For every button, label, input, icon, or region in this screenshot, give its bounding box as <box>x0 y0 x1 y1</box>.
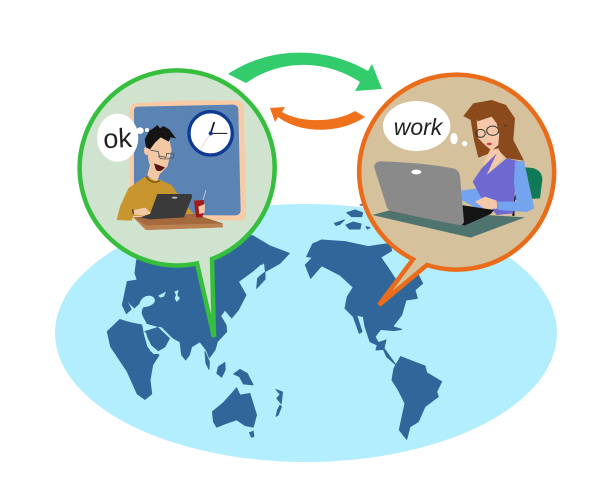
icon: wall clock <box>189 112 232 155</box>
ear <box>144 146 149 155</box>
face <box>477 113 500 151</box>
collar <box>146 177 160 182</box>
landmass: Americas <box>305 202 442 439</box>
neck <box>483 148 503 175</box>
world map <box>107 202 442 439</box>
desk mat <box>372 209 525 238</box>
man figure <box>117 125 223 230</box>
arm skin <box>462 188 494 209</box>
map background ellipse <box>55 204 557 462</box>
window pane <box>134 105 241 215</box>
thought bubble <box>97 114 149 162</box>
illustration: woman at laptop <box>372 100 542 238</box>
illustration: man at laptop <box>97 100 246 230</box>
speech bubble: man in green circle <box>80 70 275 337</box>
hand <box>475 197 497 209</box>
glasses <box>150 150 174 159</box>
woman figure <box>462 100 534 215</box>
lips <box>487 143 492 145</box>
thought bubble <box>383 101 467 151</box>
arrow: green curved arrow to the right <box>228 53 382 91</box>
label: work: work <box>394 114 444 140</box>
speech bubble: woman in orange circle <box>359 75 554 305</box>
laptop keyboard <box>390 205 494 225</box>
inland seas <box>120 263 265 354</box>
torso <box>117 177 194 221</box>
bubble shape <box>359 75 554 305</box>
bubble shape <box>80 70 275 337</box>
arrow: orange curved arrow to the left <box>270 107 365 130</box>
desk <box>133 214 223 230</box>
landmass: Africa <box>107 319 159 399</box>
chair <box>513 167 542 200</box>
neck <box>147 165 160 181</box>
head <box>147 135 172 177</box>
hair <box>145 125 176 149</box>
fringe <box>477 107 507 143</box>
hand on laptop <box>134 208 152 215</box>
sleeve <box>497 161 534 212</box>
laptop lid <box>374 161 464 225</box>
landmass: Eurasia <box>122 230 289 369</box>
drink cup with straw <box>203 190 206 201</box>
landmass: Indonesia, Australia, New Zealand <box>212 362 283 437</box>
back hair <box>463 100 524 161</box>
blouse <box>473 153 520 215</box>
window frame <box>129 100 246 221</box>
laptop <box>140 194 192 219</box>
mouth <box>154 163 165 171</box>
label: ok: ok <box>102 123 133 154</box>
glasses <box>476 125 507 137</box>
